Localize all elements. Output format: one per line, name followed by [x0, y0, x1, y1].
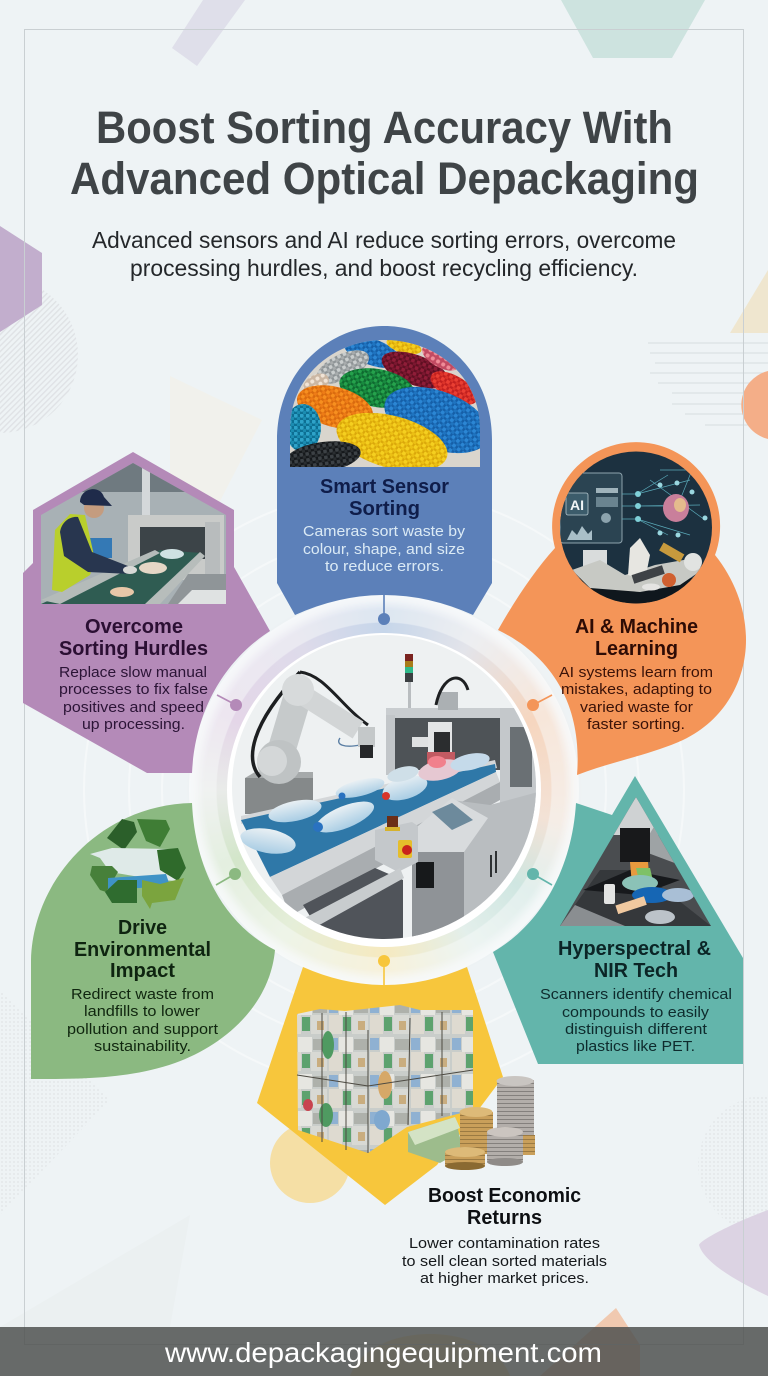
image: worker at conveyor [41, 460, 227, 605]
panel: ai and machine learning [498, 442, 746, 775]
heading: Learning [595, 638, 678, 660]
body text: distinguish different [565, 1022, 707, 1038]
body text: Cameras sort waste by [303, 524, 466, 540]
control cabinet [412, 792, 536, 936]
body text: to sell clean sorted materials [402, 1254, 607, 1270]
light tower [405, 654, 413, 708]
image: ai monitor and plastics: AI [570, 497, 584, 513]
body text: mistakes, adapting to [561, 682, 712, 698]
body text: sustainability. [94, 1039, 191, 1055]
panel: hyperspectral and nir tech [493, 776, 743, 1064]
body text: up processing. [82, 717, 185, 733]
central image: robot sorting line [227, 633, 545, 947]
subtitle: Advanced sensors and AI reduce sorting errors, overcome [92, 227, 676, 253]
title [70, 102, 699, 204]
conveyor frame [295, 868, 404, 940]
body text: faster sorting. [587, 717, 685, 733]
panel: drive environmental impact [31, 803, 275, 1079]
body text: pollution and support [67, 1022, 218, 1038]
inspection machine [386, 678, 540, 828]
panel: smart sensor sorting [277, 326, 499, 615]
body text: Scanners identify chemical [540, 987, 732, 1003]
heading: Boost Economic [428, 1185, 581, 1207]
image: ai monitor and plastics [558, 450, 714, 608]
heading: Drive [118, 917, 167, 939]
body text: positives and speed [63, 700, 204, 716]
image: plastic bale [297, 1005, 473, 1153]
heading: Impact [110, 960, 175, 982]
heading: AI & Machine [575, 616, 698, 638]
footer band with website: www.depackagingequipment.com [164, 1337, 602, 1368]
connector: blue [378, 590, 390, 625]
panel: overcome sorting hurdles [23, 452, 270, 773]
heading: Hyperspectral & [558, 938, 711, 960]
connector: purple [217, 695, 242, 711]
body text: processes to fix false [59, 682, 208, 698]
body text: Replace slow manual [59, 665, 207, 681]
heading: Overcome [85, 616, 183, 638]
heading [320, 476, 449, 520]
conveyor belt with bottles [238, 750, 500, 916]
body text: plastics like PET. [576, 1039, 695, 1055]
footer band with website [0, 1327, 768, 1376]
body text: Redirect waste from [71, 987, 214, 1003]
subtitle [92, 227, 676, 281]
body text: AI systems learn from [559, 665, 713, 681]
heading: Smart Sensor [320, 476, 449, 498]
heading: Environmental [74, 939, 211, 961]
image: hyperspectral scanner [558, 795, 713, 927]
body text [59, 665, 208, 733]
connector: orange [527, 695, 552, 711]
connector: green [216, 868, 241, 885]
heading: Sorting Hurdles [59, 638, 208, 660]
heading [59, 616, 208, 660]
image: plastic pellets [290, 340, 480, 467]
heading [74, 917, 211, 982]
connector: yellow [378, 955, 390, 985]
body text: landfills to lower [84, 1004, 200, 1020]
title: Advanced Optical Depackaging [70, 153, 699, 204]
body text [540, 987, 732, 1055]
body text: compounds to easily [562, 1005, 710, 1021]
title: Boost Sorting Accuracy With [96, 102, 673, 153]
heading: Returns [467, 1207, 542, 1229]
heading [428, 1185, 581, 1229]
robot arm [245, 672, 375, 814]
connector: teal [527, 868, 552, 885]
body text [67, 987, 218, 1055]
heading [575, 616, 698, 660]
heading [558, 938, 711, 982]
body text: at higher market prices. [420, 1271, 589, 1287]
emergency stop box [375, 816, 418, 872]
body text: to reduce errors. [325, 559, 444, 575]
body text [402, 1236, 607, 1287]
body text [303, 524, 466, 575]
heading: NIR Tech [594, 960, 678, 982]
panel: boost economic returns [257, 967, 607, 1287]
subtitle: processing hurdles, and boost recycling efficiency. [130, 255, 638, 281]
body text: colour, shape, and size [303, 542, 465, 558]
central gradient ring [200, 601, 572, 980]
image: cash and coins [408, 1076, 535, 1170]
body text [559, 665, 713, 733]
body text: Lower contamination rates [409, 1236, 600, 1252]
icon: recycling symbol with landscape [90, 819, 186, 909]
body text: varied waste for [580, 700, 693, 716]
heading: Sorting [349, 498, 420, 520]
